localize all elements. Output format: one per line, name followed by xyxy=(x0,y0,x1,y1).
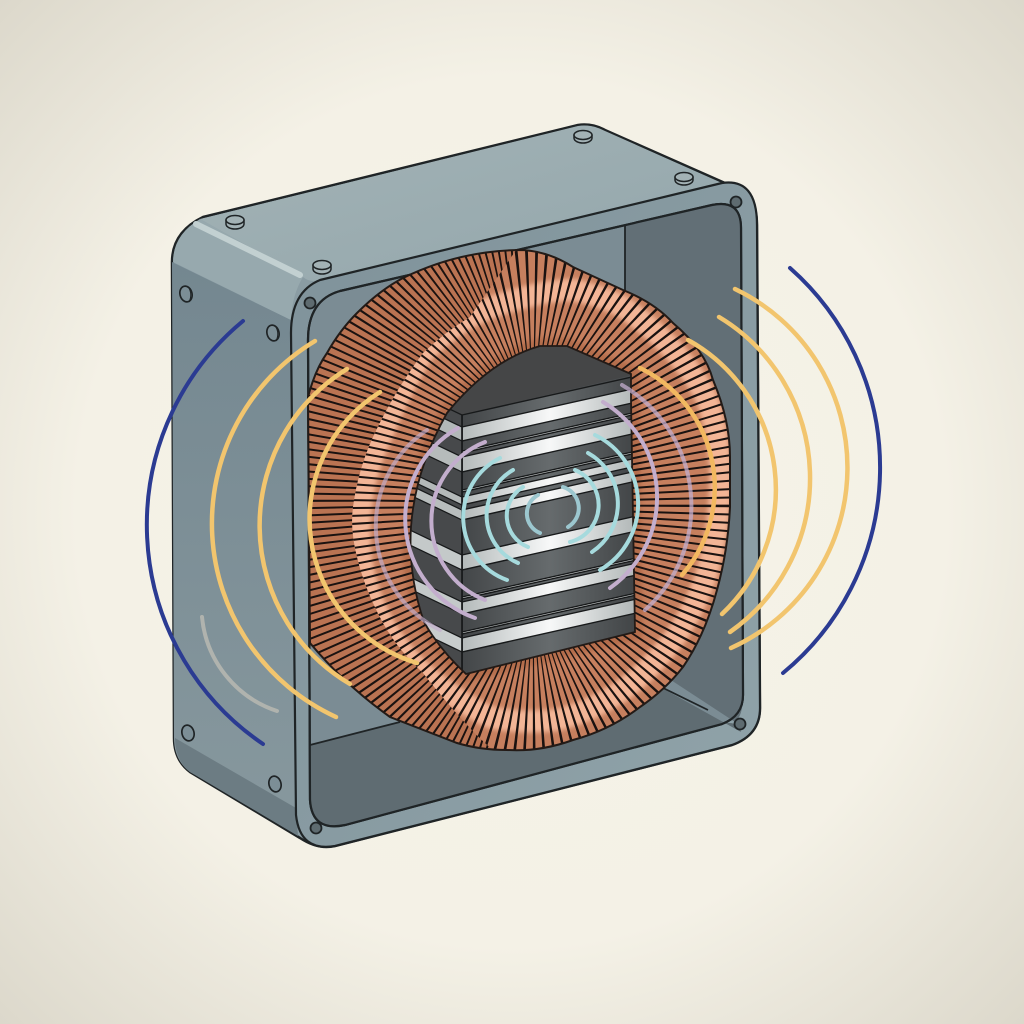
face windings xyxy=(381,299,685,711)
interior edges xyxy=(310,225,708,745)
copper coil xyxy=(290,240,740,760)
core right face plates xyxy=(462,376,637,685)
interior outline xyxy=(308,204,743,826)
core corner edge xyxy=(461,415,463,678)
core top surface xyxy=(519,376,628,402)
face copper xyxy=(340,240,740,760)
core left face plates xyxy=(411,409,463,652)
copper base xyxy=(309,251,516,748)
wave arcs xyxy=(147,268,880,744)
teal arcs xyxy=(463,435,638,580)
top left bevel xyxy=(173,219,303,320)
enclosure xyxy=(172,125,760,847)
interior back wall xyxy=(308,204,743,826)
blue arcs xyxy=(147,268,880,744)
laminated core xyxy=(411,346,634,673)
shoulder highlight xyxy=(360,290,720,721)
coil outline xyxy=(308,250,730,750)
side windings xyxy=(309,251,513,748)
front frame xyxy=(291,183,760,847)
left face bottom strip xyxy=(175,738,298,836)
bevel highlight xyxy=(196,224,300,275)
yellow arcs xyxy=(212,289,847,717)
left face screws xyxy=(178,285,283,793)
inner shade xyxy=(411,346,635,674)
enclosure silhouette xyxy=(172,125,760,847)
frame corner screws xyxy=(304,196,746,834)
hole outline xyxy=(411,346,635,674)
interior right wall xyxy=(625,204,743,722)
coil windings xyxy=(309,251,729,750)
left face xyxy=(172,262,296,832)
coil face xyxy=(340,240,740,760)
interior floor xyxy=(310,683,741,826)
gray arc xyxy=(202,617,277,711)
top screws xyxy=(226,130,693,274)
purple arcs xyxy=(376,385,691,630)
top face xyxy=(200,126,724,281)
core base xyxy=(509,376,630,404)
